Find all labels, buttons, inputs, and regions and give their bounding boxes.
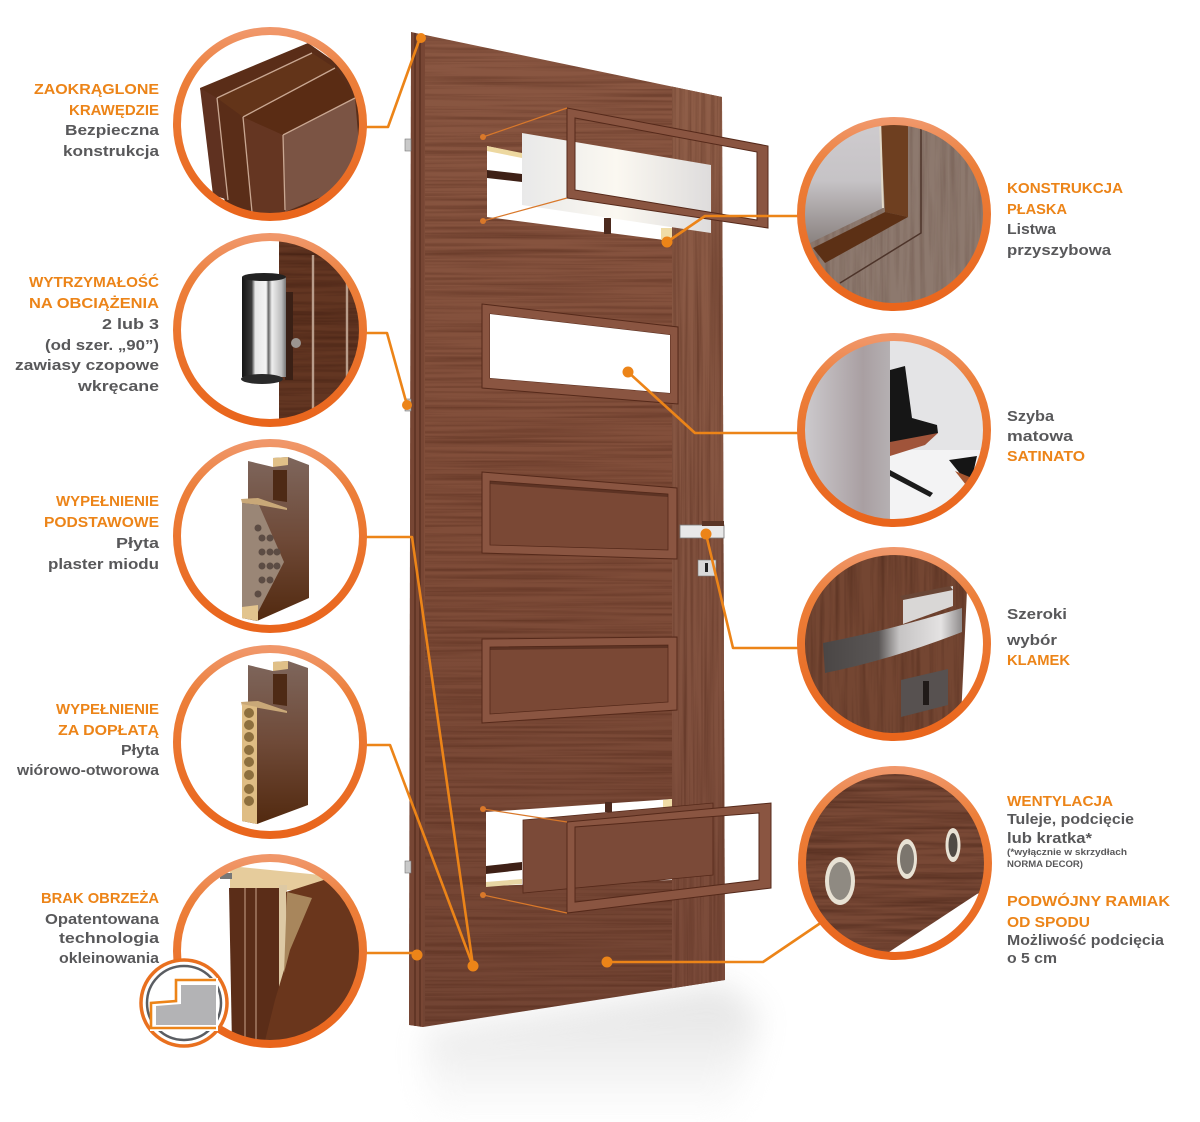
text: basic filling: WYPEŁNIENIE	[56, 493, 159, 510]
text: load resistance: zawiasy czopowe	[15, 357, 159, 374]
handle on door	[680, 521, 724, 576]
text: load resistance: (od szer. „90”)	[45, 337, 159, 354]
bottom window opening	[486, 799, 672, 887]
glass window frame	[482, 304, 678, 404]
text: ventilation: NORMA DECOR)	[1007, 859, 1083, 869]
leader: handles	[700, 528, 800, 648]
text: flat construction	[1007, 180, 1123, 259]
text: satin glass: SATINATO	[1007, 448, 1085, 465]
inset: edge profile	[141, 960, 227, 1046]
text: flat construction: KONSTRUKCJA	[1007, 180, 1123, 197]
door leaf	[405, 30, 771, 1030]
text: handles	[1006, 606, 1070, 669]
bottom frame pulled out	[567, 803, 771, 913]
text: ventilation: Tuleje, podcięcie	[1007, 811, 1134, 828]
panel frame 3	[482, 472, 677, 559]
text: extra filling	[16, 701, 160, 779]
glass pane pulled out	[522, 133, 711, 233]
text: handles: Szeroki	[1007, 606, 1067, 623]
leader: basic filling	[362, 537, 478, 972]
text: double bottom rail: o 5 cm	[1007, 950, 1057, 967]
text: extra filling: wiórowo-otworowa	[16, 762, 160, 779]
text: satin glass: matowa	[1007, 428, 1074, 445]
text: double bottom rail	[1007, 892, 1170, 967]
wood panel pulled out	[523, 803, 713, 893]
leader: no edge banding	[362, 950, 422, 960]
leader: ventilation	[602, 922, 822, 968]
text: load resistance: wkręcane	[77, 378, 159, 395]
text: basic filling: Płyta	[116, 535, 160, 552]
door left edge	[409, 32, 425, 1027]
text: flat construction: Listwa	[1007, 221, 1057, 238]
text: ventilation: WENTYLACJA	[1007, 793, 1113, 810]
text: no edge banding: Opatentowana	[45, 911, 160, 928]
top window opening	[487, 146, 672, 241]
text: rounded edges: konstrukcja	[63, 143, 160, 160]
leader: load resistance	[362, 333, 412, 410]
text: load resistance: NA OBCIĄŻENIA	[29, 295, 159, 312]
door grain	[425, 30, 675, 1030]
text: basic filling	[44, 493, 160, 573]
text: satin glass: Szyba	[1007, 408, 1055, 425]
text: no edge banding: okleinowania	[59, 950, 160, 967]
circle: chipboard filling	[177, 649, 363, 835]
text: extra filling: Płyta	[121, 742, 160, 759]
text: flat construction: przyszybowa	[1007, 242, 1112, 259]
text: no edge banding: technologia	[59, 930, 160, 947]
leader: rounded edges	[362, 33, 426, 127]
circle: ventilation	[800, 768, 992, 958]
text: handles: KLAMEK	[1007, 652, 1070, 669]
text: ventilation: (*wyłącznie w skrzydłach	[1007, 847, 1127, 857]
text: extra filling: WYPEŁNIENIE	[56, 701, 159, 718]
circle: rounded edges	[177, 31, 375, 225]
text: extra filling: ZA DOPŁATĄ	[58, 722, 159, 739]
text: rounded edges: KRAWĘDZIE	[69, 102, 159, 119]
circle: honeycomb filling	[177, 443, 363, 629]
text: double bottom rail: PODWÓJNY RAMIAK	[1007, 892, 1170, 910]
leader: extra filling	[362, 745, 473, 966]
text: rounded edges: Bezpieczna	[65, 122, 160, 139]
door floor shadow	[425, 985, 760, 1122]
circle: hinge	[177, 235, 369, 425]
circle: flat construction	[800, 118, 990, 308]
text: satin glass	[1007, 408, 1085, 465]
text: no edge banding	[41, 890, 160, 967]
leader: satin glass	[622, 366, 800, 433]
text: double bottom rail: Możliwość podcięcia	[1007, 932, 1165, 949]
text: flat construction: PŁASKA	[1007, 201, 1067, 218]
text: ventilation	[1007, 793, 1134, 869]
thin leader lines top	[480, 108, 567, 224]
text: load resistance	[15, 273, 159, 395]
text: double bottom rail: OD SPODU	[1007, 914, 1090, 931]
text: no edge banding: BRAK OBRZEŻA	[41, 890, 159, 907]
top window frame pulled out	[567, 108, 768, 228]
panel frame 4	[482, 637, 677, 723]
door face	[409, 32, 725, 1027]
text: basic filling: plaster miodu	[48, 556, 159, 573]
text: rounded edges: ZAOKRĄGLONE	[34, 81, 159, 98]
circle: handles	[800, 550, 992, 740]
text: ventilation: lub kratka*	[1007, 830, 1092, 847]
text: load resistance: 2 lub 3	[102, 316, 159, 333]
door right stile	[672, 80, 730, 990]
circle: satin glass	[800, 335, 990, 530]
circle: no edge banding	[141, 858, 370, 1046]
text: rounded edges	[34, 81, 160, 160]
leader: flat construction	[662, 216, 800, 248]
text: handles: wybór	[1006, 632, 1057, 649]
hinges	[405, 139, 411, 873]
thin leader lines bottom	[480, 806, 567, 913]
text: basic filling: PODSTAWOWE	[44, 514, 159, 531]
text: load resistance: WYTRZYMAŁOŚĆ	[29, 273, 159, 291]
